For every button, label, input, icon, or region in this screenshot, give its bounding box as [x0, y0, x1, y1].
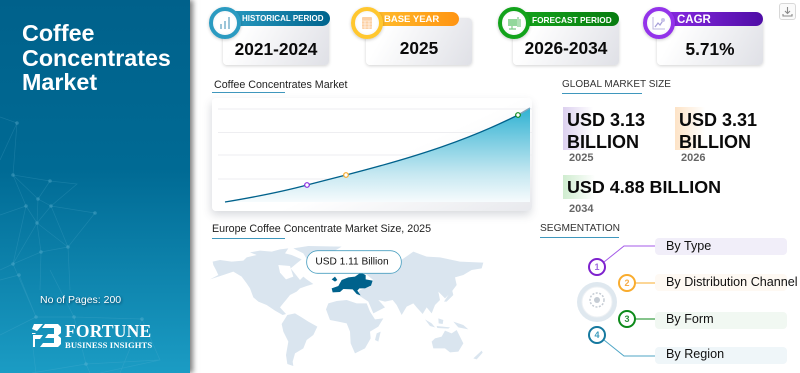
stat: 2025 market size — [563, 107, 645, 164]
panel: base year — [350, 6, 474, 68]
badge: 3: 3 — [624, 314, 630, 324]
badge: 2 — [618, 274, 636, 292]
stat: 2034 market size: 2034 — [569, 203, 593, 215]
stat: 2026 market size: USD 3.31 — [679, 110, 757, 130]
badge: 4: 4 — [594, 330, 600, 340]
segment bar: by distribution channel — [655, 274, 787, 291]
panel: CAGR: 5.71% — [685, 39, 734, 59]
title — [22, 20, 171, 95]
label: base year: BASE YEAR — [384, 14, 439, 25]
heading: global market size: GLOBAL MARKET SIZE — [562, 79, 671, 90]
badge: 1 — [588, 258, 606, 276]
badge: 3 — [618, 310, 636, 328]
area chart — [218, 108, 532, 203]
segment label: by distribution channel: By Distribution Channel — [666, 275, 798, 289]
icon: forecast chart — [498, 7, 530, 39]
label: forecast period: FORECAST PERIOD — [532, 15, 612, 25]
logo name: FORTUNE — [65, 321, 151, 341]
panel: left sidebar — [0, 0, 190, 373]
panel: forecast period: 2026-2034 — [525, 38, 607, 58]
label: CAGR — [658, 12, 763, 26]
callout: Europe value — [307, 251, 401, 273]
chart: world map — [211, 246, 484, 366]
badge: 1: 1 — [594, 262, 600, 272]
stat: 2025 market size: 2025 — [569, 152, 593, 164]
panel: historical period: 2021-2024 — [235, 39, 317, 59]
segment label: by region: By Region — [666, 347, 724, 361]
segment bar: by type — [655, 238, 787, 255]
point: 2025 — [305, 183, 309, 187]
callout: Europe value: USD 1.11 Billion — [315, 257, 389, 268]
heading: segmentation: SEGMENTATION — [540, 223, 620, 234]
panel: CAGR — [642, 6, 764, 68]
icon: growth — [643, 7, 675, 39]
label: historical period: HISTORICAL PERIOD — [242, 14, 324, 23]
region: Europe — [332, 273, 373, 295]
heading: market chart: Coffee Concentrates Market — [214, 79, 347, 91]
panel: line chart — [212, 98, 532, 211]
segment label: by form: By Form — [666, 312, 714, 326]
stat: 2034 market size — [563, 175, 721, 215]
title: Concentrates — [22, 45, 171, 71]
stat: 2034 market size: USD 4.88 BILLION — [567, 177, 721, 197]
segment bar: by region — [655, 347, 787, 364]
logo mark — [32, 324, 61, 347]
logo subtitle: BUSINESS INSIGHTS — [65, 340, 152, 350]
panel: forecast period — [496, 6, 620, 68]
point: 2034 — [516, 113, 520, 117]
stat: 2026 market size — [675, 107, 757, 164]
panel: base year: 2025 — [400, 38, 438, 58]
segment label: by type: By Type — [666, 239, 711, 253]
badge: 4 — [588, 326, 606, 344]
label: historical period — [225, 11, 330, 26]
panel: historical period — [208, 6, 330, 68]
title: Market — [22, 69, 97, 95]
stat: 2025 market size: USD 3.13 — [567, 110, 645, 130]
label: base year — [366, 12, 459, 26]
label: forecast period — [513, 12, 619, 26]
label: CAGR: CAGR — [677, 14, 711, 26]
logo: Fortune Business Insights — [32, 321, 152, 350]
page count: No of Pages: 200 — [40, 294, 121, 306]
segment bar: by form — [655, 312, 787, 329]
badge: 2: 2 — [624, 278, 630, 288]
stat: 2026 market size: 2026 — [681, 152, 705, 164]
icon: download — [779, 3, 796, 20]
stat: 2026 market size: BILLION — [679, 132, 751, 152]
icon: calendar — [351, 7, 383, 39]
title: Coffee — [22, 20, 94, 46]
diagram: segmentation connectors — [577, 246, 655, 356]
heading: Europe map: Europe Coffee Concentrate Market Size, 2025 — [212, 223, 431, 235]
stat: 2025 market size: BILLION — [567, 132, 639, 152]
point: 2026 — [344, 173, 348, 177]
icon: bar chart — [209, 7, 241, 39]
